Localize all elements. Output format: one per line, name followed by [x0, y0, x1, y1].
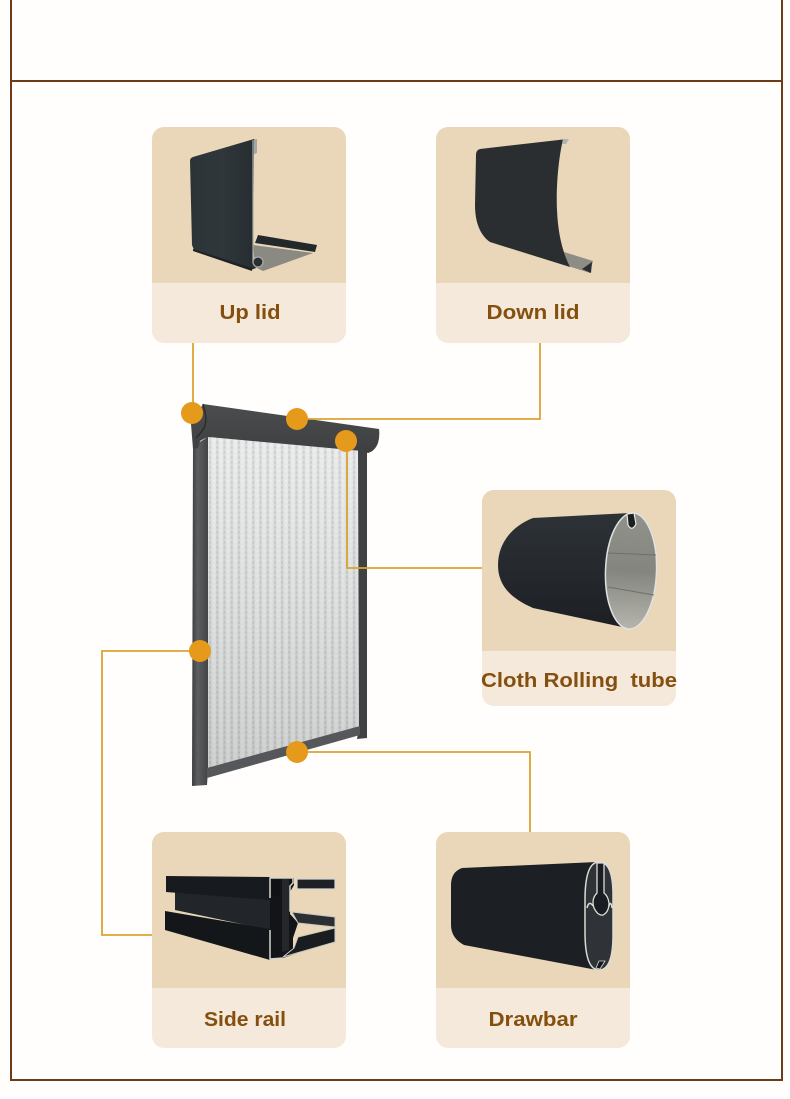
- icon: side rail profile: [165, 876, 335, 960]
- product: roller screen window: [191, 404, 379, 786]
- card: Cloth Rolling tube: [481, 490, 677, 706]
- label: Down lid: Down lid: [486, 302, 580, 324]
- card: Drawbar: [436, 832, 630, 1048]
- icon: drawbar profile: [451, 862, 613, 970]
- connector lines: [102, 343, 540, 935]
- cassette end cap: [196, 404, 206, 438]
- label: Up lid: Up lid: [220, 302, 280, 324]
- right side rail: [357, 450, 367, 739]
- icon: rolling tube: [498, 512, 659, 630]
- label: Side rail: Side rail: [204, 1009, 286, 1031]
- left side rail: [192, 437, 208, 786]
- icon: down lid profile: [475, 139, 593, 273]
- label: Cloth Rolling tube: Cloth Rolling tube: [481, 670, 677, 692]
- card: Down lid: [436, 127, 630, 343]
- bottom bar: [207, 726, 360, 778]
- card: Side rail: [152, 832, 346, 1048]
- marker dots: [181, 402, 357, 763]
- card: Up lid: [152, 127, 346, 343]
- mesh fabric: [206, 434, 360, 770]
- label: Drawbar: Drawbar: [488, 1009, 578, 1031]
- icon: up lid profile: [190, 139, 317, 271]
- top cassette: [191, 404, 379, 453]
